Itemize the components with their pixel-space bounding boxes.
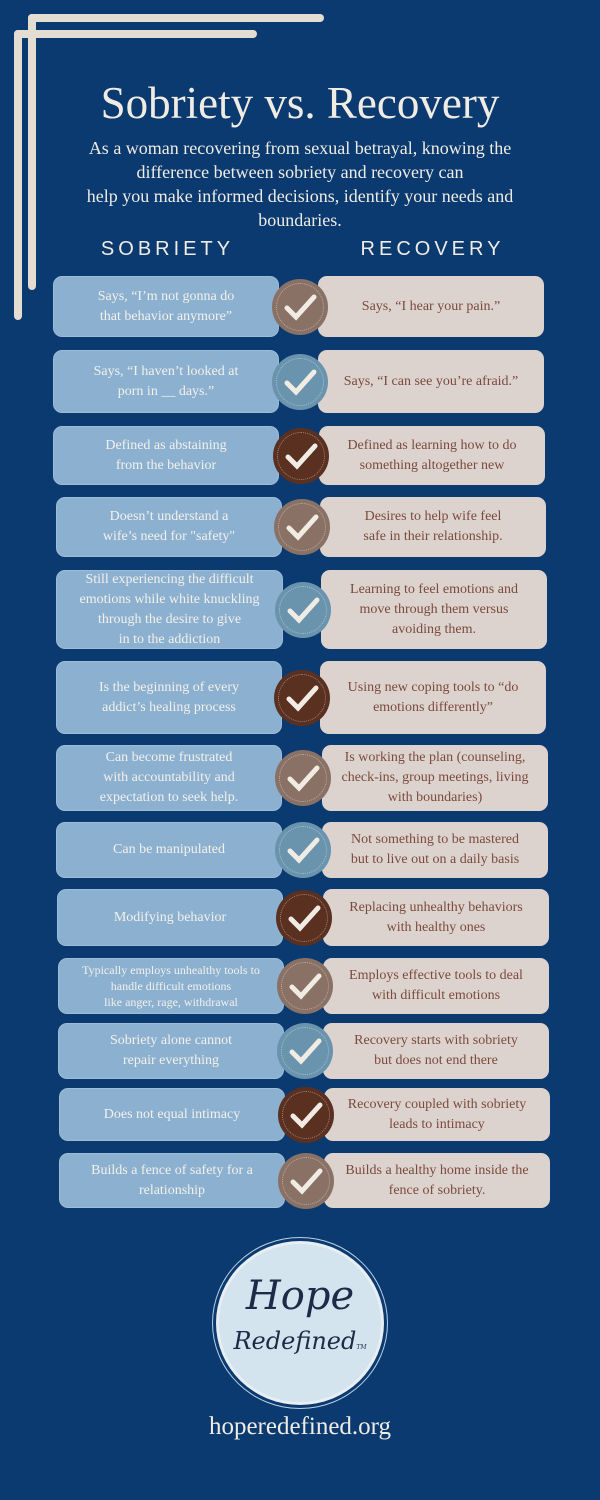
row 3: from the behavior [116,458,216,472]
row 10: with difficult emotions [372,988,500,1003]
row 9 [57,889,549,946]
row 8: Can be manipulated [113,842,225,857]
row 4 [56,497,546,557]
row 12: Does not equal intimacy [104,1106,240,1122]
row 7: expectation to seek help. [100,790,238,805]
row 4: Desires to help wife feel [365,509,501,524]
row 4: wife’s need for "safety" [103,529,235,544]
title: Sobriety vs. Recovery [101,78,499,128]
row 10: Typically employs unhealthy tools to [82,963,260,977]
row 7: with accountability and [103,770,235,785]
heading: sobriety: SOBRIETY [101,238,234,260]
row 8: Not something to be mastered [351,832,519,847]
row 6: addict’s healing process [102,700,236,714]
decorative corner frame [14,14,324,320]
logo: RedefinedTM [233,1327,367,1355]
row 3: Defined as abstaining [105,438,227,452]
row 9: Replacing unhealthy behaviors [349,900,523,914]
row 11 [58,1023,549,1079]
row 1: that behavior anymore” [100,308,232,324]
row 5: in to the addiction [119,632,220,646]
row 6: Is the beginning of every [99,680,239,694]
row 10: handle difficult emotions [111,979,231,993]
row 1: Says, “I’m not gonna do [98,288,234,304]
row 11: Recovery starts with sobriety [354,1033,518,1048]
row 7: with boundaries) [388,790,482,805]
row 13 [59,1153,550,1209]
row 7: check-ins, group meetings, living [341,770,529,785]
row 2 [53,350,544,413]
row 5: Still experiencing the difficult [85,572,254,586]
row 13: Builds a fence of safety for a [91,1162,253,1178]
row 12: leads to intimacy [389,1116,485,1132]
row 6 [56,661,546,734]
row 7: Is working the plan (counseling, [345,750,525,765]
row 7 [56,745,548,811]
row 5 [56,570,547,649]
website url: hoperedefined.org [209,1413,391,1440]
row 11: Sobriety alone cannot [110,1033,232,1048]
row 5: Learning to feel emotions and [350,582,518,596]
row 11: repair everything [123,1053,219,1068]
heading: recovery: RECOVERY [361,238,504,260]
row 3 [53,426,545,485]
row 13: Builds a healthy home inside the [345,1162,529,1178]
row 7: Can become frustrated [106,750,232,765]
row 5: through the desire to give [98,612,241,626]
row 10 [58,958,549,1014]
row 10: Employs effective tools to deal [349,968,523,983]
row 9: with healthy ones [387,920,485,934]
row 9: Modifying behavior [114,910,226,924]
intro text: boundaries. [258,210,342,230]
row 13: fence of sobriety. [389,1182,485,1198]
row 8 [56,822,548,878]
row 1 [53,276,544,337]
intro text: difference between sobriety and recovery can [136,162,464,182]
row 6: emotions differently” [373,700,493,714]
row 10: like anger, rage, withdrawal [104,995,238,1009]
intro text: help you make informed decisions, identify your needs and [87,186,513,206]
row 5: move through them versus [360,602,508,616]
logo [216,1241,384,1405]
logo: Hope [246,1273,354,1319]
intro text [86,138,514,230]
row 12: Recovery coupled with sobriety [348,1096,526,1112]
row 6: Using new coping tools to “do [348,680,518,694]
row 12 [59,1087,550,1143]
row 2: Says, “I can see you’re afraid.” [344,374,518,388]
row 1: Says, “I hear your pain.” [362,298,500,314]
row 4: Doesn’t understand a [110,509,228,524]
row 2: porn in __ days.” [118,384,214,398]
row 5: avoiding them. [392,622,476,636]
row 13: relationship [139,1182,205,1198]
row 8: but to live out on a daily basis [351,852,519,867]
row 3: Defined as learning how to do [347,438,517,452]
row 2: Says, “I haven’t looked at [94,364,238,378]
intro text: As a woman recovering from sexual betrayal, knowing the [89,138,511,158]
row 11: but does not end there [374,1053,498,1068]
row 5: emotions while white knuckling [79,592,260,606]
row 4: safe in their relationship. [363,529,503,544]
row 3: something altogether new [360,458,504,472]
